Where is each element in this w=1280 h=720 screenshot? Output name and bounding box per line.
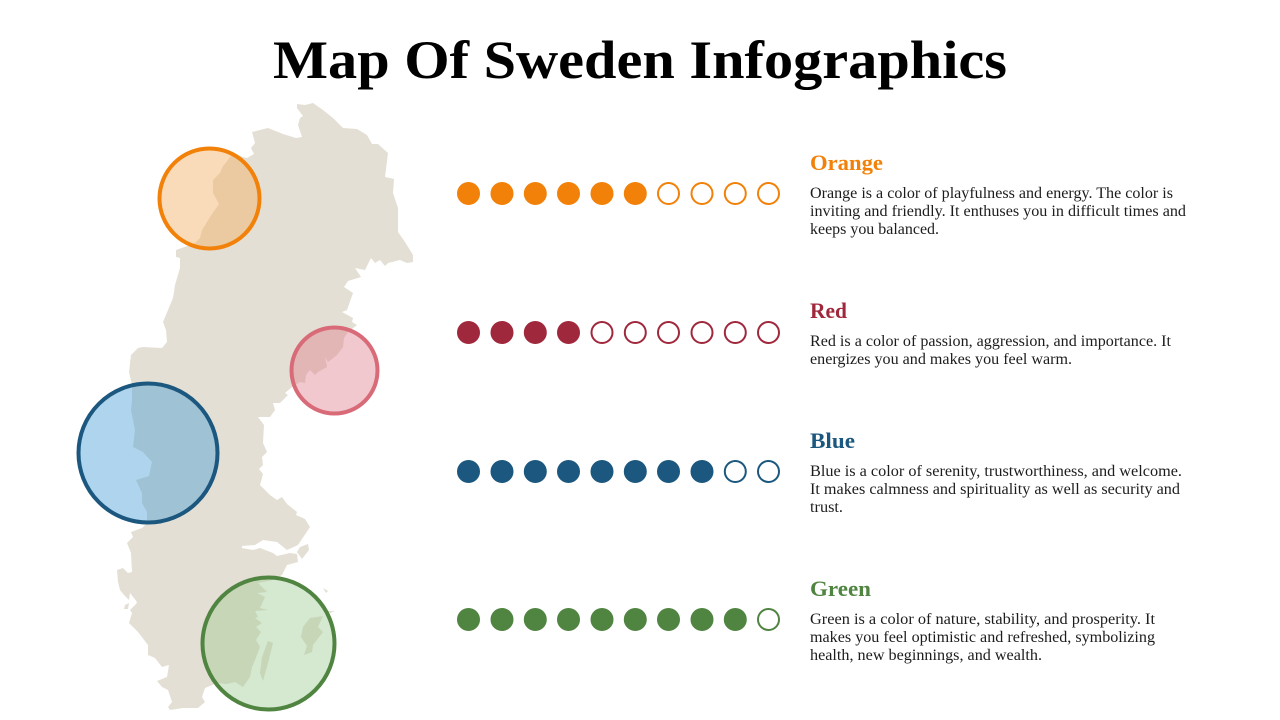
map of Sweden <box>117 103 413 710</box>
text block: red: Red <box>810 298 847 323</box>
text block: blue <box>810 428 1182 516</box>
text block: blue: Blue is a color of serenity, trustworthiness, and welcome. <box>810 463 1182 480</box>
callout circle: red <box>292 328 378 414</box>
callout circle: green <box>202 578 334 710</box>
text block: orange <box>810 150 1186 238</box>
dot rating: blue <box>458 461 779 482</box>
text block: green: makes you feel optimistic and refreshed, symbolizing <box>810 629 1155 646</box>
callout circle: orange <box>160 148 260 248</box>
title: Map Of Sweden Infographics <box>273 30 1007 90</box>
text block: blue: trust. <box>810 499 843 516</box>
text block: green: Green is a color of nature, stability, and prosperity. It <box>810 611 1156 628</box>
text block: orange: keeps you balanced. <box>810 221 939 238</box>
text block: orange: Orange <box>810 150 883 175</box>
text block: green <box>810 576 1156 664</box>
text block: green: health, new beginnings, and wealth. <box>810 647 1042 664</box>
callout circle: blue <box>78 384 218 522</box>
text block: red: energizes you and makes you feel warm. <box>810 351 1072 368</box>
text block: blue: Blue <box>810 428 855 453</box>
text block: green: Green <box>810 576 871 601</box>
dot rating: green <box>458 609 779 630</box>
dot rating: orange <box>458 183 779 204</box>
text block: red: Red is a color of passion, aggression, and importance. It <box>810 333 1172 350</box>
text block: blue: It makes calmness and spirituality as well as security and <box>810 481 1180 498</box>
dot rating: red <box>458 322 779 343</box>
text block: red <box>810 298 1172 368</box>
text block: orange: inviting and friendly. It enthuses you in difficult times and <box>810 203 1186 220</box>
text block: orange: Orange is a color of playfulness and energy. The color is <box>810 185 1173 202</box>
